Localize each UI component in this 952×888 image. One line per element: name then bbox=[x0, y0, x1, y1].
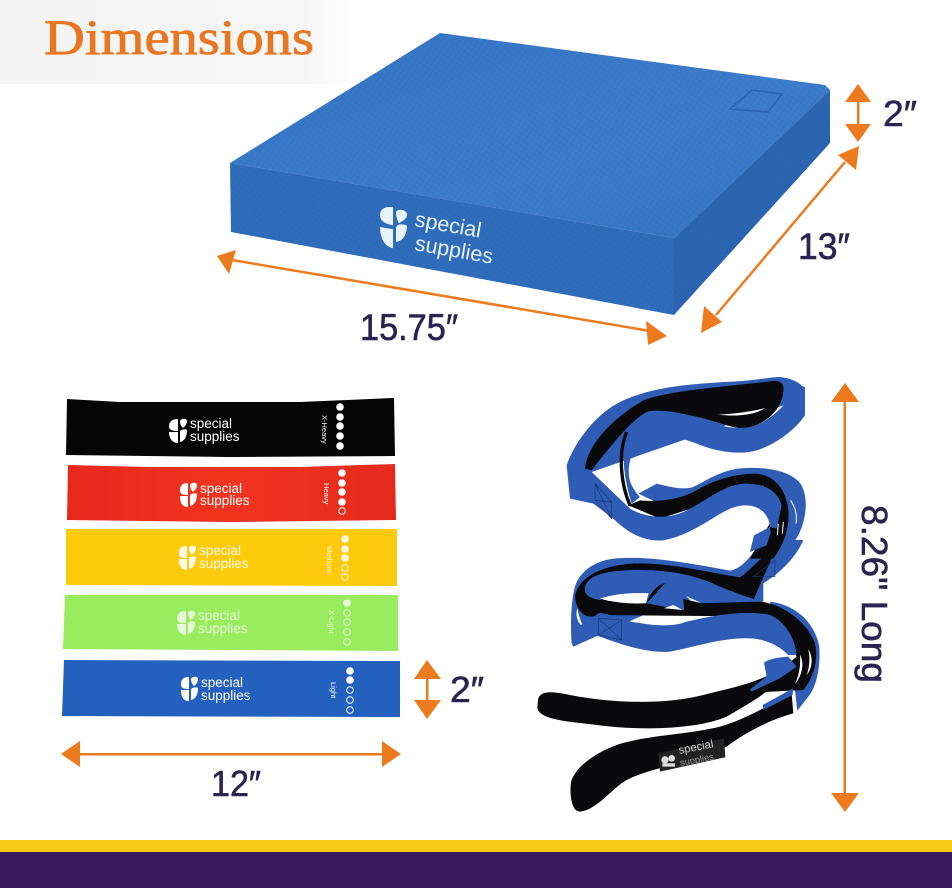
strap lower peak bbox=[647, 583, 684, 610]
band: light blue bbox=[62, 660, 400, 717]
strap lower tab bbox=[750, 657, 797, 692]
strap lower outer band bbox=[571, 540, 803, 647]
pad top face bbox=[230, 33, 830, 238]
band: light blue: special bbox=[201, 675, 243, 690]
band: x-light green bbox=[63, 595, 398, 651]
strap tag: special bbox=[678, 738, 715, 757]
band: medium yellow: supplies bbox=[199, 556, 249, 571]
stretching strap bbox=[537, 377, 820, 812]
band: x-light green: X-Light bbox=[327, 610, 336, 635]
title: Dimensions bbox=[44, 9, 314, 65]
strap tag: supplies bbox=[679, 752, 715, 768]
strap lower front band bbox=[572, 613, 797, 655]
balance pad: supplies bbox=[413, 231, 495, 269]
band: light blue: Light bbox=[329, 682, 338, 699]
strap white slots bbox=[577, 593, 812, 684]
band: heavy red: Heavy bbox=[322, 483, 331, 505]
strap tag bbox=[658, 738, 725, 772]
arrow: width 13 inch bbox=[701, 146, 859, 333]
strap stitching bbox=[595, 484, 775, 640]
band: light blue: supplies bbox=[201, 688, 251, 703]
strap end blue strip bbox=[763, 688, 793, 710]
header background bbox=[0, 0, 358, 84]
pad brand text: special bbox=[413, 207, 483, 243]
band: heavy red bbox=[67, 464, 396, 522]
footer yellow stripe bbox=[0, 840, 952, 852]
strap lower section back bbox=[571, 540, 820, 711]
strap upper section bbox=[567, 377, 806, 559]
label: 15.75 inch: 15.75″ bbox=[360, 307, 458, 348]
strap middle front band bbox=[567, 465, 782, 540]
strap black end two bbox=[571, 693, 793, 812]
label: band height 2 inch: 2″ bbox=[450, 669, 484, 710]
label: 8.26 inch long: 8.26" Long bbox=[854, 505, 895, 683]
strap top loop outer bbox=[567, 377, 805, 479]
band: x-heavy black bbox=[66, 398, 395, 457]
band: medium yellow: Medium bbox=[325, 546, 334, 573]
resistance bands bbox=[62, 398, 400, 717]
strap middle tab bbox=[750, 527, 771, 552]
pad front face bbox=[230, 163, 674, 315]
strap lower lining bbox=[575, 540, 816, 693]
band: x-light green: special bbox=[198, 608, 240, 623]
strap top loop lining bbox=[585, 381, 784, 470]
band: medium yellow: special bbox=[199, 543, 241, 558]
band: x-heavy black: supplies bbox=[190, 429, 240, 444]
strap inner edge bbox=[621, 432, 630, 505]
arrow: length 15.75 inch bbox=[217, 250, 667, 345]
arrow: height 2 inch bbox=[845, 84, 871, 142]
band: x-light green: supplies bbox=[198, 621, 248, 636]
band: x-heavy black: X-Heavy bbox=[320, 415, 329, 444]
label: 12 inch: 12″ bbox=[211, 763, 261, 804]
label: 13 inch: 13″ bbox=[798, 226, 850, 267]
arrow: strap length bbox=[831, 383, 859, 812]
pad logo bbox=[380, 205, 407, 251]
arrow: band width 12 inch bbox=[61, 741, 401, 767]
pad corner emblem bbox=[730, 90, 782, 112]
strap top front band bbox=[624, 385, 805, 504]
footer purple bar bbox=[0, 852, 952, 888]
strap black end one bbox=[537, 670, 782, 728]
strap top opening bbox=[718, 408, 765, 416]
strap right outer band bbox=[770, 602, 820, 711]
strap middle slits bbox=[777, 500, 796, 535]
strap lower inner band bbox=[585, 570, 763, 603]
strap middle outer band bbox=[638, 468, 806, 559]
strap middle lining bbox=[628, 474, 789, 559]
balance pad bbox=[230, 33, 830, 315]
band: x-heavy black: special bbox=[190, 416, 232, 431]
arrow: band height 2 inch bbox=[414, 660, 441, 719]
band: heavy red: special bbox=[200, 481, 242, 496]
label: 2 inch pad: 2″ bbox=[883, 93, 917, 134]
band: heavy red: supplies bbox=[200, 493, 250, 508]
band: medium yellow bbox=[66, 529, 397, 586]
pad right face bbox=[674, 90, 830, 315]
